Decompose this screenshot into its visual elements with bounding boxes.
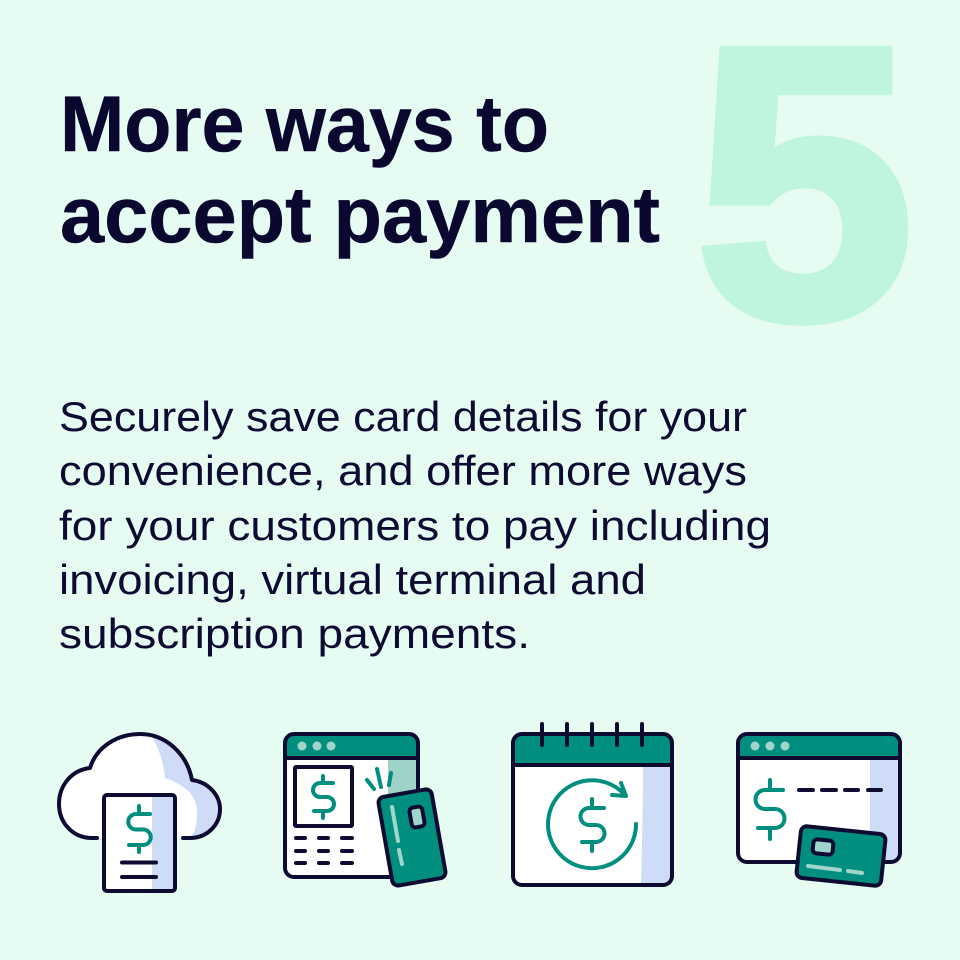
icon: calendar with recurring payment: [513, 724, 672, 885]
body text: convenience, and offer more ways: [59, 447, 747, 494]
body text: [59, 393, 771, 657]
icon: virtual terminal window with card: [738, 734, 900, 886]
body text: for your customers to pay including: [59, 502, 771, 549]
title: accept payment: [60, 170, 660, 259]
body text: invoicing, virtual terminal and: [59, 556, 646, 603]
title: More ways to: [60, 79, 549, 168]
title: [60, 79, 660, 259]
icon: cloud with invoice: [59, 734, 220, 891]
icon: payment terminal with card: [285, 734, 446, 887]
body text: subscription payments.: [59, 610, 530, 657]
body text: Securely save card details for your: [59, 393, 747, 440]
